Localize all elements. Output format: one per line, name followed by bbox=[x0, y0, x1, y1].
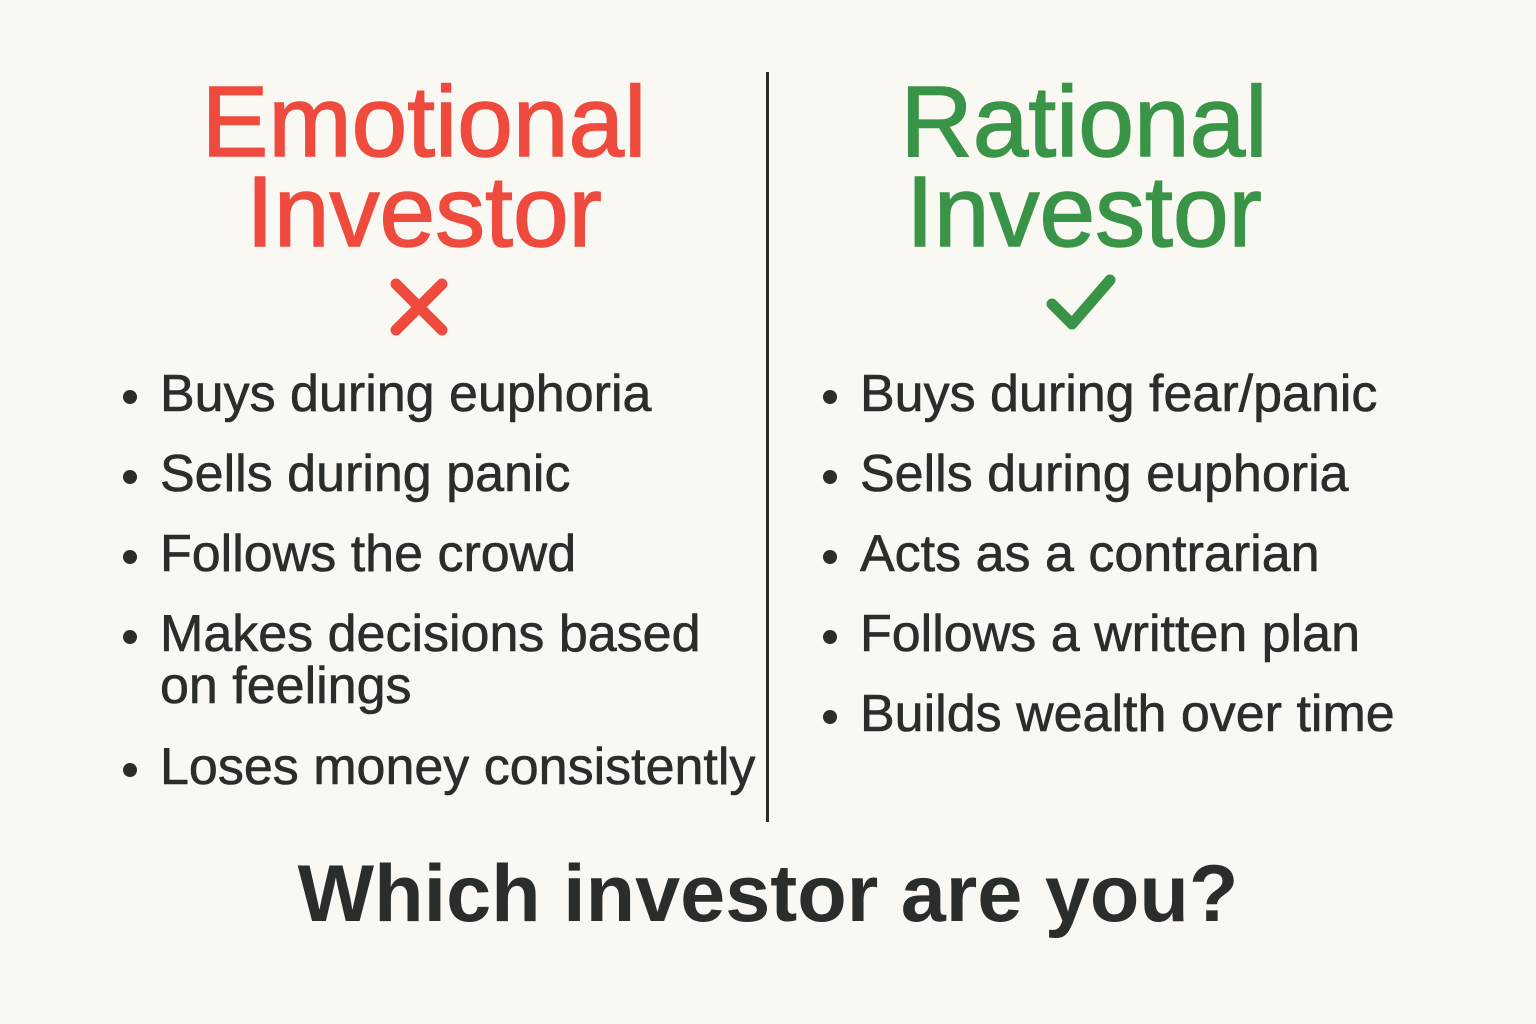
bullet: sells during euphoria: Sells during euphoria bbox=[860, 445, 1349, 503]
panel: emotional investor bbox=[123, 66, 756, 796]
heading: Rational Investor: Rational bbox=[901, 66, 1267, 178]
bullet: builds wealth over time: Builds wealth over time bbox=[860, 685, 1395, 743]
bullet: makes decisions based on feelings: Makes decisions based bbox=[160, 605, 701, 663]
bullet: sells during panic: Sells during panic bbox=[160, 445, 570, 503]
bullet: makes decisions based on feelings bbox=[160, 608, 701, 712]
panel: rational investor bbox=[823, 66, 1395, 743]
heading: Rational Investor bbox=[901, 66, 1267, 268]
bullet: follows a written plan: Follows a written plan bbox=[860, 605, 1360, 663]
list: rational traits bbox=[823, 365, 1395, 743]
footer question: Which investor are you? bbox=[298, 849, 1238, 939]
icon: green check bbox=[1046, 274, 1116, 330]
heading: Emotional Investor: Emotional bbox=[202, 66, 646, 178]
bullet: buys during fear/panic: Buys during fear/panic bbox=[860, 365, 1377, 423]
bullet: follows the crowd: Follows the crowd bbox=[160, 525, 576, 583]
bullet: acts as a contrarian: Acts as a contrarian bbox=[860, 525, 1320, 583]
heading: Rational Investor: Investor bbox=[906, 156, 1262, 268]
list: emotional traits bbox=[123, 365, 756, 796]
bullet: loses money consistently: Loses money consistently bbox=[160, 738, 755, 796]
icon: red cross bbox=[390, 278, 448, 336]
heading: Emotional Investor bbox=[202, 66, 646, 268]
bullet: makes decisions based on feelings: on feelings bbox=[160, 657, 412, 715]
bullet: buys during euphoria: Buys during euphoria bbox=[160, 365, 651, 423]
heading: Emotional Investor: Investor bbox=[246, 156, 602, 268]
